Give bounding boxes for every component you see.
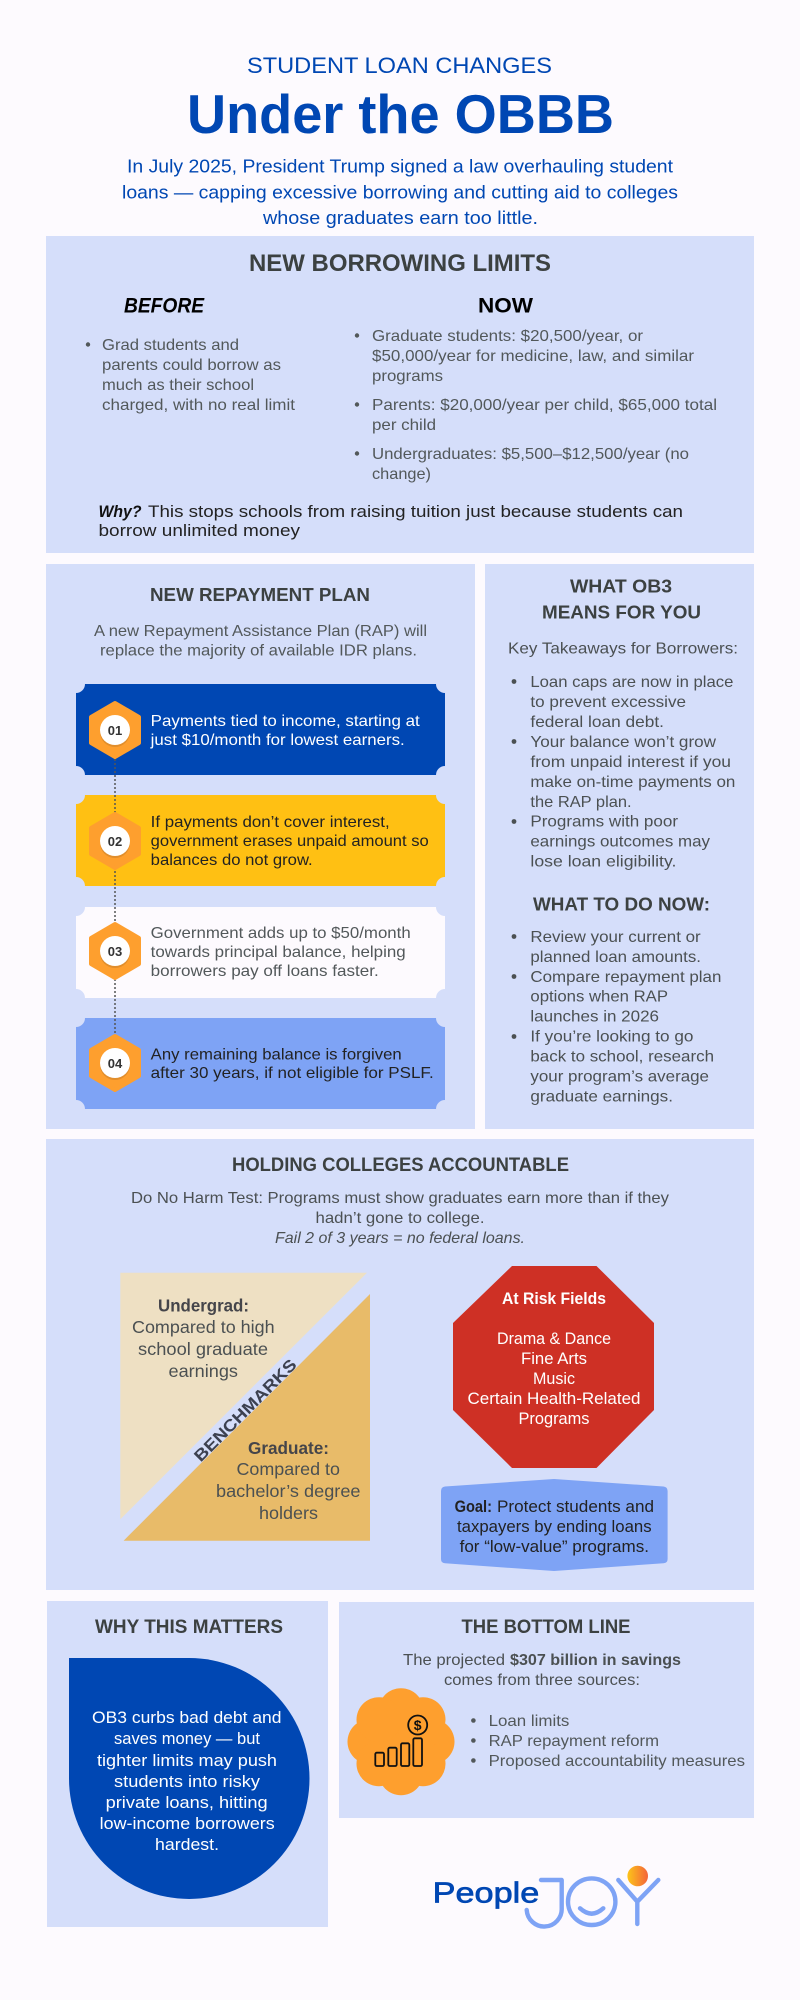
card 3: towards principal balance, helping <box>151 944 406 961</box>
key takeaways list <box>508 641 738 871</box>
heading: what OB3 means for you <box>542 576 701 622</box>
heading: the bottom line: THE BOTTOM LINE <box>462 1617 630 1638</box>
column: now: change) <box>372 466 431 483</box>
what to do now list: options when RAP <box>530 989 668 1006</box>
do no harm test text: Fail 2 of 3 years = no federal loans. <box>275 1230 525 1247</box>
title block: whose graduates earn too little. <box>262 208 538 228</box>
benchmark: undergrad triangle: Undergrad: <box>158 1296 249 1316</box>
key takeaways list: federal loan debt. <box>530 714 664 731</box>
title block: loans — capping excessive borrowing and cutting aid to colleges <box>122 182 678 202</box>
panel: what OB3 means for you <box>485 564 754 1129</box>
card 1: just $10/month for lowest earners. <box>150 732 405 749</box>
card 2: If payments don’t cover interest, <box>151 814 390 831</box>
panel: the bottom line <box>339 1602 754 1818</box>
step badge 04 <box>91 1036 139 1090</box>
panel: holding colleges accountable <box>46 1139 754 1590</box>
benchmarks diagonal label: BENCHMARKS <box>191 1356 301 1466</box>
key takeaways list: Programs with poor <box>530 814 679 831</box>
card 2 <box>76 795 445 886</box>
column: now: programs <box>372 368 443 385</box>
heading: why this matters: WHY THIS MATTERS <box>95 1617 283 1638</box>
card 3: borrowers pay off loans faster. <box>151 963 379 980</box>
card 4 <box>76 1018 445 1109</box>
column: now: Graduate students: $20,500/year, or <box>372 328 644 345</box>
at risk fields octagon <box>453 1266 654 1468</box>
heading: new repayment plan: NEW REPAYMENT PLAN <box>150 584 370 605</box>
what to do now list: Review your current or <box>530 929 701 946</box>
why note: This stops schools from raising tuition just because students can <box>148 502 683 521</box>
column: now: Parents: $20,000/year per child, $65,000 total <box>372 397 717 414</box>
blue teardrop callout: tighter limits may push <box>97 1751 277 1770</box>
what to do now list: your program’s average <box>530 1069 709 1086</box>
key takeaways list: Your balance won’t grow <box>530 734 716 751</box>
column: now: Undergraduates: $5,500–$12,500/year (no <box>372 446 689 463</box>
title block <box>122 53 678 228</box>
step badge 01 <box>91 703 139 757</box>
benchmark: undergrad triangle <box>120 1273 367 1519</box>
at risk fields octagon: At Risk Fields <box>502 1289 606 1308</box>
intro text: replace the majority of available IDR plans. <box>100 642 417 660</box>
do no harm test text: Do No Harm Test: Programs must show graduates earn more than if they <box>131 1190 669 1207</box>
benchmark: graduate triangle: holders <box>259 1503 318 1523</box>
logo: PeopleJOY: People <box>433 1878 539 1910</box>
do no harm test text: hadn’t gone to college. <box>316 1210 484 1227</box>
column: before: parents could borrow as <box>102 357 281 374</box>
what to do now list: graduate earnings. <box>530 1089 673 1106</box>
step badge 01: 01 <box>108 723 122 738</box>
at risk fields octagon: Programs <box>518 1409 590 1428</box>
what to do now list: launches in 2026 <box>530 1009 659 1026</box>
column: now: $50,000/year for medicine, law, and similar <box>372 348 695 365</box>
card 1: Payments tied to income, starting at <box>151 713 420 730</box>
savings text: $307 billion in savings <box>510 1652 681 1669</box>
at risk fields octagon: Certain Health-Related <box>468 1389 640 1408</box>
title block: STUDENT LOAN CHANGES <box>247 53 552 78</box>
benchmark: graduate triangle: Graduate: <box>248 1438 329 1458</box>
sources list <box>471 1713 745 1770</box>
why note: Why? <box>98 502 142 521</box>
card 3: Government adds up to $50/month <box>151 925 411 942</box>
blue teardrop callout: hardest. <box>155 1835 219 1854</box>
column: before: much as their school <box>102 377 254 394</box>
card 4: Any remaining balance is forgiven <box>151 1046 402 1064</box>
column: before: Grad students and <box>102 337 239 354</box>
do no harm test text <box>131 1190 669 1247</box>
blue teardrop callout: OB3 curbs bad debt and <box>92 1708 282 1727</box>
key takeaways list: Key Takeaways for Borrowers: <box>508 641 738 658</box>
column: now: per child <box>372 417 436 434</box>
column: now <box>355 294 717 483</box>
benchmark: graduate triangle <box>124 1294 370 1541</box>
at risk fields octagon: Music <box>533 1369 575 1388</box>
benchmark: graduate triangle: bachelor’s degree <box>216 1481 360 1501</box>
heading: what OB3 means for you: MEANS FOR YOU <box>542 602 701 622</box>
goal callout: for “low-value” programs. <box>460 1537 649 1556</box>
intro text <box>94 623 427 660</box>
panel: new borrowing limits <box>46 236 754 553</box>
blue teardrop callout: private loans, hitting <box>106 1793 268 1812</box>
at risk fields octagon: Fine Arts <box>521 1349 587 1368</box>
what to do now list: back to school, research <box>530 1049 714 1066</box>
intro text: A new Repayment Assistance Plan (RAP) will <box>94 623 427 640</box>
heading: holding colleges accountable: HOLDING COLLEGES ACCOUNTABLE <box>232 1155 569 1176</box>
sources list: Loan limits <box>489 1713 569 1730</box>
key takeaways list: to prevent excessive <box>530 694 686 711</box>
key takeaways list: the RAP plan. <box>530 794 632 811</box>
title block: In July 2025, President Trump signed a law overhauling student <box>127 156 673 176</box>
key takeaways list: make on-time payments on <box>530 774 735 791</box>
panel: why this matters <box>47 1601 328 1927</box>
key takeaways list: lose loan eligibility. <box>530 854 676 871</box>
savings text <box>403 1652 681 1689</box>
what to do now list: If you’re looking to go <box>530 1029 694 1046</box>
what to do now list <box>512 929 721 1106</box>
why note: borrow unlimited money <box>98 521 301 540</box>
column: before: BEFORE <box>124 294 205 318</box>
icon: orange flower with bar chart and coin: $ <box>414 1717 422 1733</box>
goal callout <box>441 1479 668 1571</box>
panel: new repayment plan <box>46 564 475 1129</box>
benchmark: graduate triangle: Compared to <box>236 1459 340 1479</box>
what to do now list: Compare repayment plan <box>530 969 721 986</box>
logo: PeopleJOY <box>433 1866 658 1927</box>
blue teardrop callout: saves money — but <box>114 1729 260 1748</box>
heading: what OB3 means for you: WHAT OB3 <box>570 576 672 596</box>
card 1 <box>76 684 445 775</box>
title block: Under the OBBB <box>187 83 614 145</box>
savings text: comes from three sources: <box>444 1672 640 1689</box>
card 2: balances do not grow. <box>151 852 313 869</box>
icon: orange flower with bar chart and coin <box>348 1688 454 1795</box>
key takeaways list: earnings outcomes may <box>530 834 710 851</box>
goal callout: taxpayers by ending loans <box>457 1517 652 1536</box>
blue teardrop callout: students into risky <box>114 1772 261 1791</box>
heading: new borrowing limits: NEW BORROWING LIMITS <box>249 250 551 277</box>
card 3 <box>76 907 445 998</box>
sources list: RAP repayment reform <box>489 1733 659 1750</box>
step badge 04: 04 <box>108 1056 123 1071</box>
card 2: government erases unpaid amount so <box>151 833 429 850</box>
at risk fields octagon: Drama & Dance <box>497 1329 611 1348</box>
blue teardrop callout <box>69 1658 310 1899</box>
what to do now list: planned loan amounts. <box>530 949 701 966</box>
column: before <box>86 294 296 414</box>
column: before: charged, with no real limit <box>102 397 296 414</box>
step badge 02: 02 <box>108 834 122 849</box>
key takeaways list: Loan caps are now in place <box>530 674 734 691</box>
sources list: Proposed accountability measures <box>489 1753 745 1770</box>
heading: what to do now: WHAT TO DO NOW: <box>533 894 710 915</box>
goal callout: Goal: <box>455 1497 492 1516</box>
benchmark: undergrad triangle: school graduate <box>138 1339 268 1359</box>
goal callout: Protect students and <box>497 1497 654 1516</box>
card 4: after 30 years, if not eligible for PSLF. <box>151 1065 434 1082</box>
step badge 02 <box>91 814 139 868</box>
benchmark: undergrad triangle: earnings <box>168 1361 238 1381</box>
benchmark: undergrad triangle: Compared to high <box>132 1317 275 1337</box>
column: now: NOW <box>478 294 533 318</box>
step badge 03: 03 <box>108 944 122 959</box>
why note <box>98 502 683 540</box>
blue teardrop callout: low-income borrowers <box>100 1814 275 1833</box>
savings text: The projected <box>403 1652 505 1669</box>
key takeaways list: from unpaid interest if you <box>530 754 731 771</box>
step badge 03 <box>91 924 139 978</box>
